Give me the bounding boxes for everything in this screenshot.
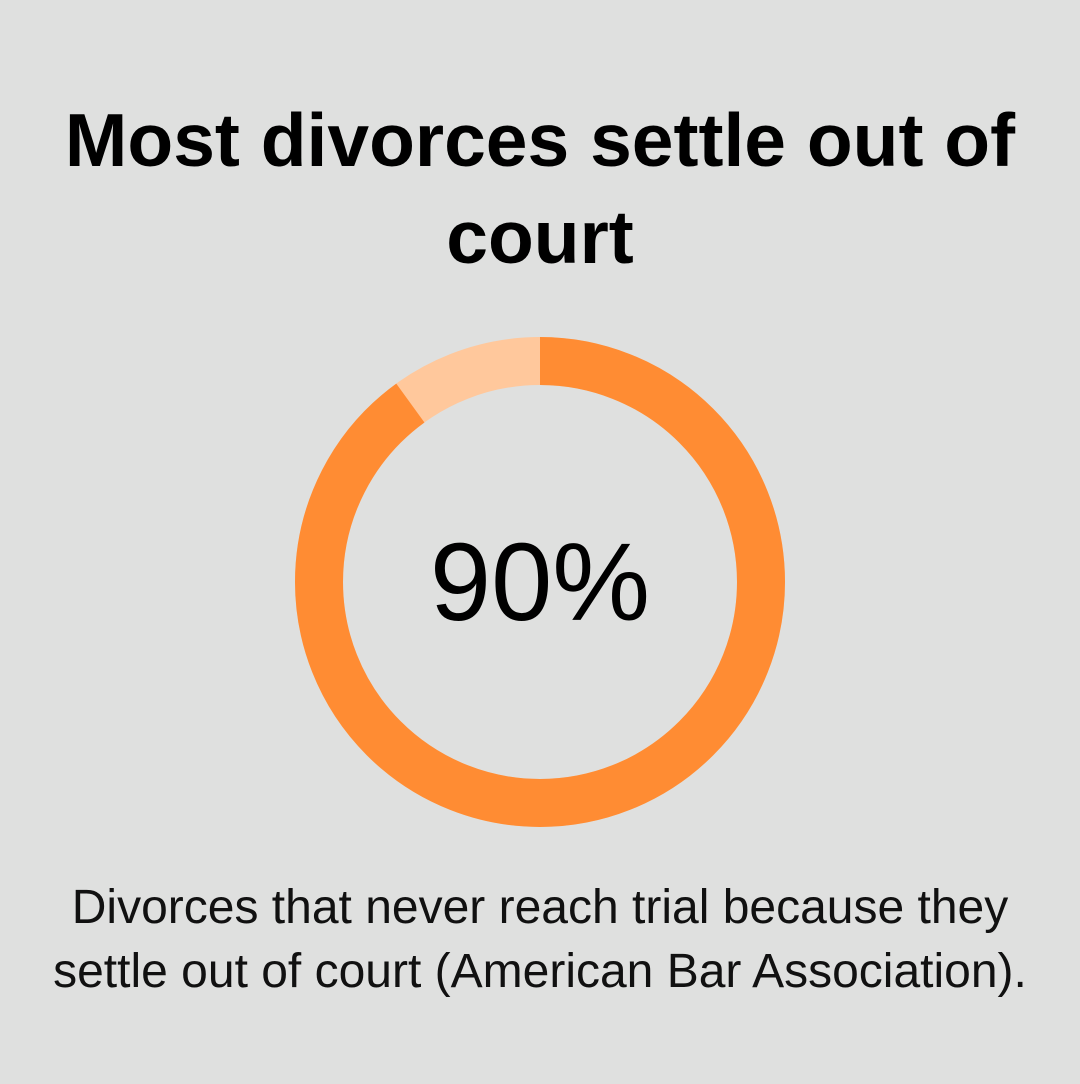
- title: court: [446, 195, 634, 279]
- caption: [53, 881, 1027, 998]
- caption: Divorces that never reach trial because they: [72, 881, 1008, 934]
- title: Most divorces settle out of: [65, 98, 1015, 182]
- chart segment: remainder 10%: [319, 361, 761, 803]
- center value: 90%: [430, 521, 650, 644]
- title: [65, 98, 1016, 279]
- chart segment: 90% settle: [319, 361, 761, 803]
- caption: settle out of court (American Bar Association).: [53, 945, 1027, 998]
